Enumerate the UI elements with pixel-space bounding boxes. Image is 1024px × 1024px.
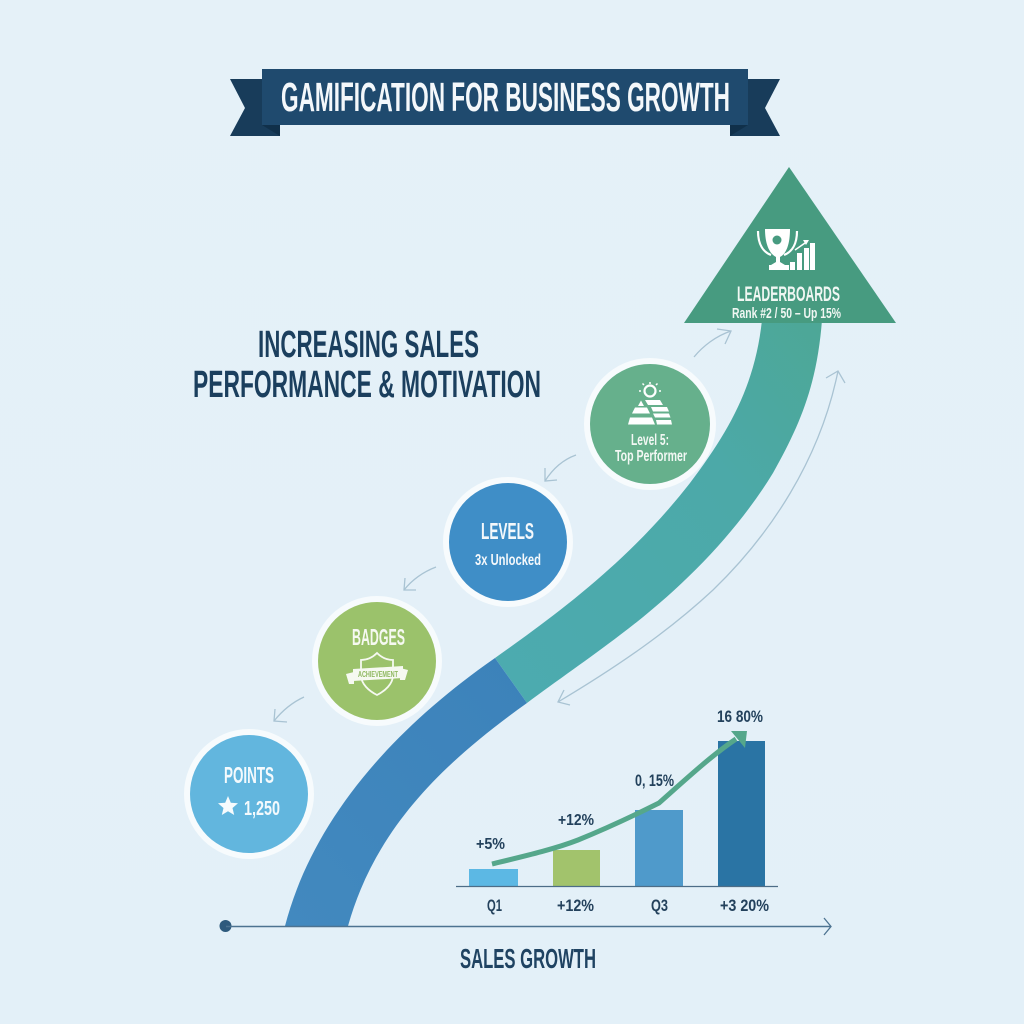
circle: levels: 3x Unlocked: [475, 552, 541, 569]
subtitle heading: PERFORMANCE & MOTIVATION: [193, 364, 541, 406]
arrow: levels to badges: [404, 567, 436, 590]
value labels: +5%: [476, 836, 505, 853]
axis labels: Q3: [651, 896, 668, 915]
subtitle heading: INCREASING SALES: [258, 324, 479, 366]
value labels: +12%: [558, 812, 594, 829]
arrow: level 5 to levels: [545, 455, 576, 481]
title ribbon: [230, 69, 780, 136]
circle: levels: LEVELS: [481, 518, 534, 544]
arrow: long double-headed curve: [558, 371, 845, 705]
circle: levels: [443, 477, 573, 607]
circle: badges: BADGES: [352, 624, 405, 650]
icon: trophy and rising bars: [758, 229, 815, 270]
value labels: [476, 707, 763, 853]
bar chart: [456, 707, 778, 915]
arrow: badges to points: [274, 697, 304, 722]
circle: points: POINTS: [224, 762, 274, 788]
growth curve: blue section: [285, 658, 527, 926]
subtitle heading: [193, 324, 541, 406]
growth curve: teal section: [495, 320, 822, 703]
circle: level 5 top performer: Top Performer: [615, 448, 687, 465]
icon: shield badge with ribbon: ACHIEVEMENT: [358, 669, 399, 679]
circle: badges: [312, 596, 442, 726]
icon: star: [218, 796, 238, 815]
axis labels: +3 20%: [720, 896, 769, 915]
arrow: level 5 to leaderboards: [694, 329, 731, 357]
trend arrow: [492, 731, 747, 864]
axis labels: Q1: [487, 896, 502, 915]
value labels: 0, 15%: [635, 771, 674, 790]
axis title: SALES GROWTH: [460, 943, 596, 974]
leaderboards arrowhead panel: Rank #2 / 50 – Up 15%: [732, 305, 841, 322]
circle: level 5 top performer: Level 5:: [631, 432, 669, 449]
axis labels: +12%: [557, 896, 594, 915]
icon: pyramid with sun: [628, 382, 672, 424]
leaderboards arrowhead panel: LEADERBOARDS: [737, 283, 840, 306]
baseline axis: [220, 918, 831, 935]
circle: points: [184, 729, 314, 859]
leaderboards arrowhead panel: [684, 167, 896, 323]
value labels: 16 80%: [717, 707, 763, 726]
circle: points: 1,250: [244, 798, 280, 820]
circle: level 5 top performer: [584, 358, 716, 490]
axis labels: [487, 896, 769, 915]
